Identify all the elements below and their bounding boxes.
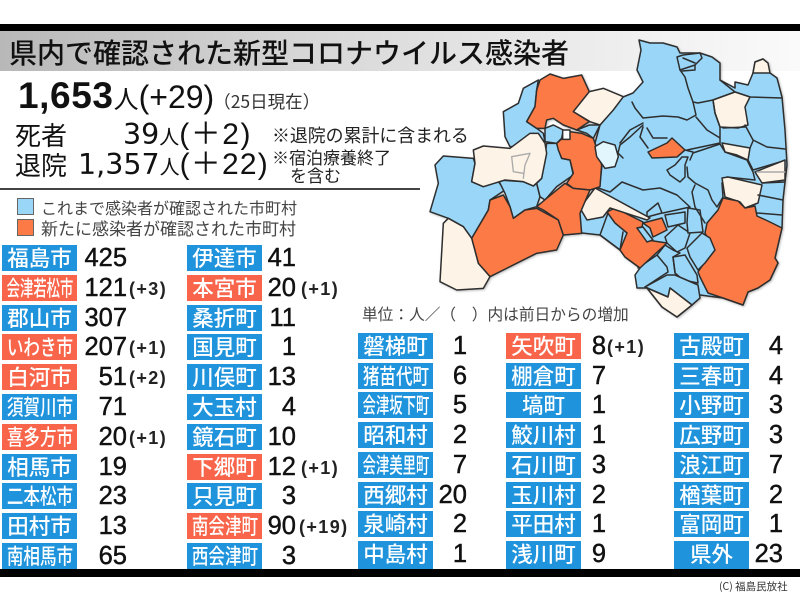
row: 南会津町: (+19) — [299, 517, 349, 537]
row: いわき市: 207 — [84, 333, 127, 361]
row: 会津坂下町 — [358, 391, 467, 419]
row: 本宮市 — [187, 274, 339, 302]
western municipalities — [430, 74, 623, 290]
row: 玉川村 — [506, 482, 656, 508]
row: 矢吹町: (+1) — [607, 337, 645, 357]
row: 川俣町: 13 — [268, 363, 296, 391]
row: 三春町 — [674, 363, 786, 389]
row: 会津若松市: 121 — [84, 274, 127, 302]
row: 中島村 — [358, 540, 467, 569]
row: 大玉村 — [187, 393, 296, 421]
row: 石川町 — [506, 452, 656, 478]
row: 猪苗代町 — [358, 362, 467, 390]
row: 古殿町 — [674, 333, 786, 359]
row: 鏡石町 — [187, 423, 296, 451]
row: 古殿町: 4 — [769, 332, 783, 360]
row: 玉川村: 2 — [592, 481, 606, 509]
column 3: towns and villages — [358, 332, 467, 569]
row: 須賀川市 — [2, 393, 127, 421]
row: 郡山市 — [2, 304, 127, 332]
row: 相馬市 — [2, 453, 127, 481]
row: 棚倉町: 7 — [592, 362, 606, 390]
row: 昭和村 — [358, 421, 467, 449]
row: いわき市: (+1) — [129, 338, 167, 358]
row: 猪苗代町: 6 — [453, 362, 467, 390]
row: 矢吹町 — [506, 333, 656, 359]
column 4: towns and villages — [506, 332, 645, 569]
row: 鏡石町: 10 — [268, 423, 296, 451]
column 5: towns and out of prefecture — [674, 333, 786, 569]
row: 小野町 — [674, 392, 786, 418]
row: 西郷村 — [358, 481, 467, 509]
row: 郡山市: 307 — [84, 304, 127, 332]
row: 田村市: 13 — [99, 512, 127, 540]
row: 二本松市: 23 — [99, 482, 127, 510]
row: 国見町 — [187, 333, 296, 361]
row: 磐梯町: 1 — [453, 332, 467, 360]
note: discharged: を含む — [290, 162, 341, 187]
note: discharged — [272, 144, 391, 187]
row: 福島市 — [2, 244, 127, 272]
row: 石川町: 3 — [592, 451, 606, 479]
row: 浪江町 — [674, 452, 786, 478]
row: 泉崎村: 2 — [453, 510, 467, 538]
row: 楢葉町 — [674, 482, 786, 508]
total cases: 1,653人(+29)（25日現在） — [18, 75, 320, 116]
row: 浅川町: 9 — [592, 540, 606, 568]
row: 昭和村: 2 — [453, 421, 467, 449]
row: 南相馬市 — [2, 542, 127, 570]
row: 田村市 — [2, 512, 127, 540]
row: 下郷町: 12 — [268, 453, 296, 481]
row: 泉崎村 — [358, 510, 467, 538]
row: 会津若松市: (+3) — [129, 279, 167, 299]
row: 桑折町: 11 — [270, 304, 296, 332]
row: 楢葉町: 2 — [769, 481, 783, 509]
row: 鮫川村: 1 — [592, 421, 606, 449]
row: 平田村 — [506, 511, 656, 537]
discharged label: 退院 — [15, 146, 67, 183]
row: 浪江町: 7 — [769, 451, 783, 479]
row: 只見町 — [187, 482, 296, 510]
note: discharged: ※宿泊療養終了 — [272, 144, 391, 169]
row: 三春町: 4 — [769, 362, 783, 390]
unit note: 単位：人／（ ）内は前日からの増加 — [362, 302, 629, 325]
small pale and white municipalities — [595, 142, 618, 168]
row: 広野町 — [674, 422, 786, 448]
new-case municipalities in the west — [472, 74, 602, 277]
row: 只見町: 3 — [282, 482, 296, 510]
deaths label: 死者 — [15, 116, 67, 153]
row: 西会津町 — [187, 542, 296, 570]
title band — [0, 31, 800, 71]
row: 本宮市: (+1) — [301, 279, 339, 299]
column 2: cities and towns — [187, 244, 349, 570]
row: 須賀川市: 71 — [99, 393, 127, 421]
row: 西郷村: 20 — [439, 481, 467, 509]
row: 棚倉町 — [506, 363, 656, 389]
credit: (C) 福島民放社 — [719, 579, 788, 594]
title: 県内で確認された新型コロナウイルス感染者 — [9, 32, 569, 72]
row: 国見町: 1 — [282, 333, 296, 361]
bottom black bar — [0, 569, 800, 577]
row: 福島市: 425 — [84, 244, 127, 272]
row: 会津美里町: 7 — [453, 451, 467, 479]
row: 喜多方市: 20 — [99, 423, 127, 451]
column 1: cities — [2, 244, 167, 570]
row: 塙町: 1 — [592, 391, 606, 419]
row: 白河市: 51 — [99, 363, 127, 391]
row: 会津美里町 — [358, 451, 467, 479]
row: 南会津町 — [187, 512, 349, 540]
row: 平田村: 1 — [592, 510, 606, 538]
row: 伊達市: 41 — [268, 244, 296, 272]
row: 下郷町 — [187, 453, 339, 481]
row: 川俣町 — [187, 363, 296, 391]
row: 白河市: (+2) — [129, 368, 167, 388]
eastern municipalities — [563, 40, 787, 317]
row: 富岡町 — [674, 511, 786, 537]
row: 県外: 23 — [755, 540, 783, 568]
row: 伊達市 — [187, 244, 296, 272]
row: 塙町 — [506, 392, 656, 418]
row: 桑折町 — [187, 304, 296, 332]
row: 広野町: 3 — [769, 421, 783, 449]
row: 会津坂下町: 5 — [453, 391, 467, 419]
row: 県外 — [674, 541, 786, 569]
row: 中島村: 1 — [453, 540, 467, 568]
row: 喜多方市 — [2, 423, 167, 451]
row: 矢吹町: 8 — [592, 332, 606, 360]
row: 浅川町 — [506, 541, 656, 569]
row: 小野町: 3 — [769, 391, 783, 419]
row: 下郷町: (+1) — [301, 458, 339, 478]
row: 白河市 — [2, 363, 167, 391]
top black bar — [0, 24, 800, 31]
row: 相馬市: 19 — [99, 453, 127, 481]
row: いわき市 — [2, 333, 167, 361]
discharged value: 1,357人(＋22) — [78, 148, 269, 181]
row: 本宮市: 20 — [268, 274, 296, 302]
row: 会津若松市 — [2, 274, 167, 302]
row: 喜多方市: (+1) — [129, 428, 167, 448]
legend: previously confirmed: これまで感染者が確認された市町村 — [41, 195, 297, 219]
legend: newly confirmed: 新たに感染者が確認された市町村 — [41, 215, 296, 240]
row: 富岡町: 1 — [769, 510, 783, 538]
row: 大玉村: 4 — [282, 393, 296, 421]
row: 南会津町: 90 — [268, 512, 296, 540]
row: 二本松市 — [2, 482, 127, 510]
divider line — [0, 188, 420, 190]
row: 鮫川村 — [506, 422, 656, 448]
no-case municipalities in the west — [440, 88, 623, 290]
deaths value: 39人(＋2) — [123, 118, 252, 151]
row: 南相馬市: 65 — [99, 542, 127, 570]
note: deaths: ※退院の累計に含まれる — [272, 122, 469, 148]
row: 西会津町: 3 — [282, 542, 296, 570]
row: 磐梯町 — [358, 332, 467, 360]
